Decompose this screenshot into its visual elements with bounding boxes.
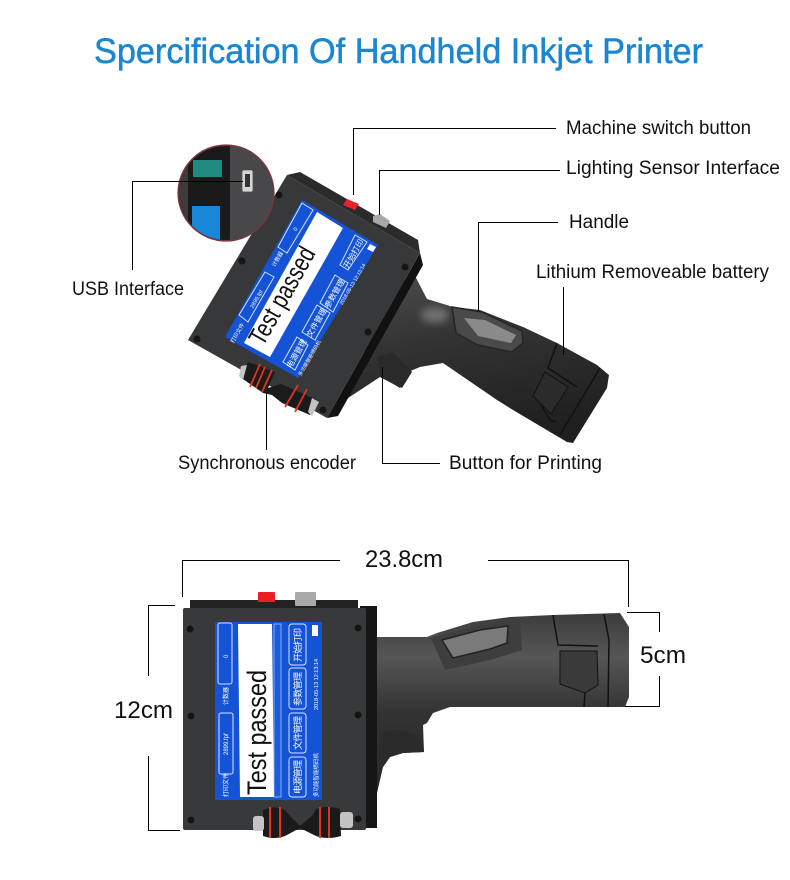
screen button labels [228,227,367,377]
dimension label: 23.8cm [365,546,443,573]
screen button labels: 打印文件 [222,773,230,797]
screen button labels: 2899.fpf [250,289,265,310]
screen button labels [222,628,320,797]
screen button labels: 2899.fpf [224,733,230,755]
dimension: height [148,606,180,830]
screen button labels: 计数器 [222,687,230,705]
leader: USB [132,182,243,270]
battery icon [312,625,318,636]
dimension: width [182,560,628,607]
callout labels [72,118,780,724]
screen button labels: 电源管理 [292,760,303,794]
screws [186,624,362,824]
screen button labels: 2018-05-13 12:13:14 [339,263,367,306]
handle and battery [360,613,629,812]
battery details [553,614,609,707]
scrollbar [274,624,281,797]
top strip [190,600,358,609]
printer side edge [327,253,423,418]
screen button labels: 开始打印 [292,628,303,662]
handle grip panel [452,307,523,352]
screen button labels: 参数管理 [292,672,303,706]
screen buttons [239,203,367,370]
handle highlight [421,307,449,323]
leader: printing button [382,367,440,464]
grip panel [442,626,508,658]
label: Button for Printing [449,453,602,474]
screen button labels: 文件管理 [292,716,303,750]
screw heads [194,192,408,414]
battery latch [560,651,598,693]
screen button labels: 2018-05-13 12:13:14 [314,659,320,710]
screen text: Test passed [242,241,321,350]
screen white display [244,212,343,357]
screen [225,200,378,378]
leader: encoder [266,392,268,450]
power button [343,199,359,210]
screen button labels: 计数器 [270,249,285,268]
leader: lighting sensor [380,170,560,215]
label: Machine switch button [566,118,751,139]
leader: machine switch button [354,128,556,195]
usb port [242,170,253,192]
screen button labels: 文件管理 [304,306,329,339]
screen buttons [218,623,306,797]
synchronous encoder wheels [239,362,319,416]
screen text: Test passed [242,670,272,795]
screen button labels: 0 [224,654,230,658]
white display [238,624,274,797]
sensor connector [295,592,316,606]
screen button labels: 打印文件 [228,321,246,345]
battery latch [533,372,568,414]
printer handle and battery [345,272,609,443]
screen button labels: 0 [293,227,299,232]
screen [215,622,322,800]
body side [360,606,377,828]
screen button labels: 参数管理 [322,277,347,310]
screen button labels: 电源管理 [284,337,309,370]
encoder wheels [253,807,353,838]
label: Handle [569,212,629,233]
label: USB Interface [72,279,184,300]
title: Spercification Of Handheld Inkjet Printer [94,32,703,71]
leader lines [132,128,660,830]
inset: USB port magnified [178,145,274,246]
grip rim [431,618,522,670]
body [183,608,366,830]
teal part [193,160,222,177]
printer: angled view [188,172,609,443]
blue part [192,206,220,240]
battery ridge [536,343,600,435]
trigger arc [377,352,412,388]
screen button labels: 开始打印 [341,237,366,270]
dimension label: 12cm [114,697,173,724]
power button [258,592,275,602]
dimension: battery [625,612,660,706]
printer body [188,175,420,418]
label: Synchronous encoder [178,453,357,474]
dimension label: 5cm [640,642,686,669]
leader: handle [478,222,558,312]
trigger arc [380,730,424,767]
label: Lighting Sensor Interface [566,158,780,179]
grip inner panel [464,318,516,343]
screen button labels: 多功能智能喷码机 [312,752,320,797]
printer: front view [183,592,629,838]
leader: battery [562,287,564,355]
label: Lithium Removeable battery [536,262,769,283]
screen button labels: 多功能智能喷码机 [297,339,323,377]
sensor connector [373,214,390,228]
battery icon [367,244,376,252]
